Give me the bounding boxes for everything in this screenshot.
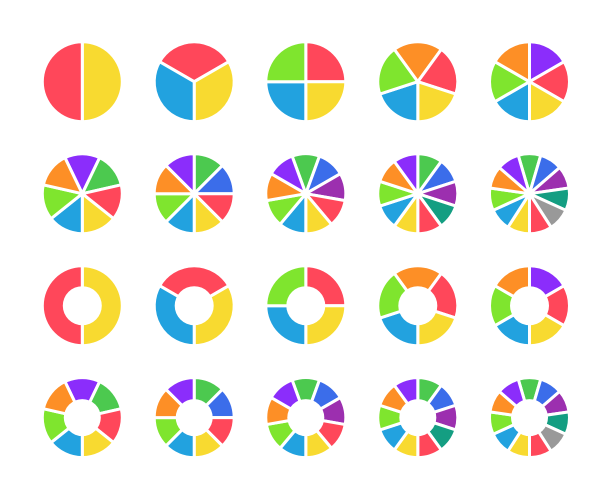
donut chart: 9 segments [260, 371, 353, 465]
donut chart: 3 segments [154, 251, 249, 350]
pie chart: 7 slices [32, 144, 128, 243]
pie chart: 9 slices [260, 147, 353, 241]
row 2: pie charts with 7 to 11 slices [32, 144, 574, 243]
row 1: pie charts with 2 to 6 slices [42, 27, 581, 132]
pie chart: 6 slices [478, 32, 581, 132]
donut chart: 2 segments [42, 266, 122, 346]
row 4: donut charts with 7 to 11 segments [32, 368, 574, 467]
row 3: donut charts with 2 to 6 segments [42, 251, 581, 356]
pie chart: 3 slices [154, 27, 249, 126]
donut chart: 8 segments [146, 369, 242, 466]
donut chart: 11 segments [484, 373, 574, 463]
donut chart: 7 segments [32, 368, 128, 467]
donut chart: 6 segments [478, 256, 581, 356]
pie chart: 8 slices [146, 145, 242, 242]
pie chart: 11 slices [484, 149, 574, 239]
pie chart: 2 slices [42, 42, 122, 122]
pie chart: 5 slices [368, 27, 472, 130]
donut chart: 4 segments [266, 266, 346, 346]
pie chart: 10 slices [372, 148, 463, 240]
donut chart: 10 segments [372, 371, 463, 464]
pie chart: 4 slices [266, 42, 346, 122]
donut chart: 5 segments [368, 251, 472, 354]
